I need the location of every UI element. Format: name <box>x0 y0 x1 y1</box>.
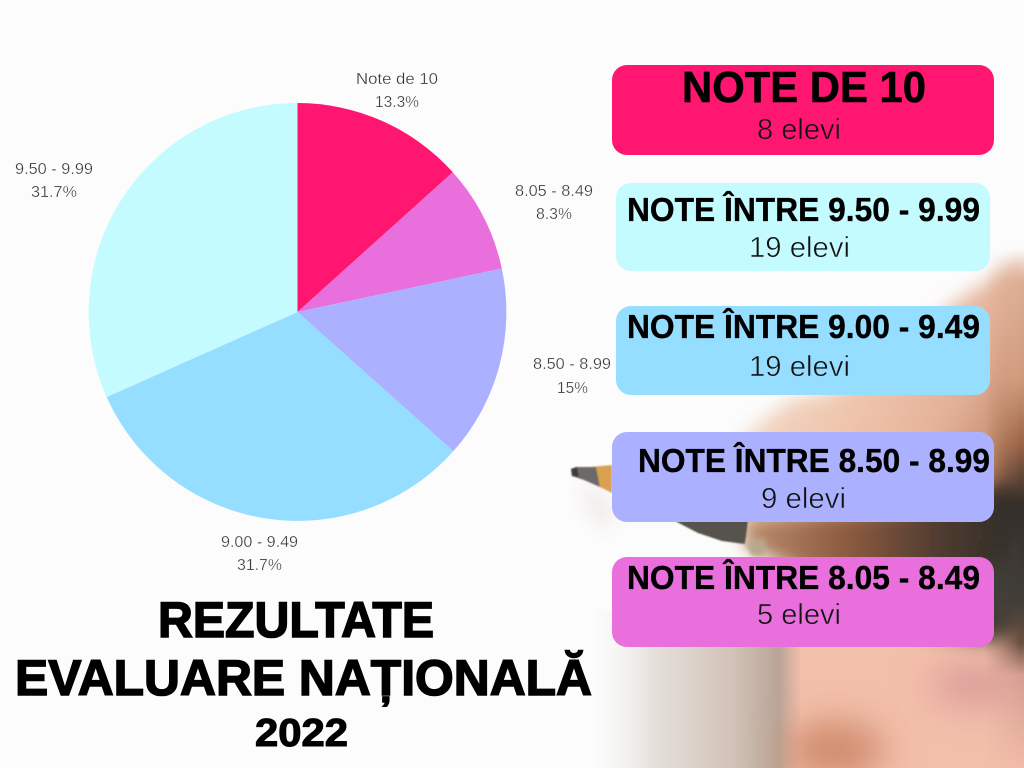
card: Note de 10: 8 elevi <box>757 114 841 146</box>
label: 8.05 - 8.49: 8.3% <box>536 206 572 223</box>
title: 2022 <box>255 712 348 755</box>
slice: 9.50 - 9.99 <box>89 103 297 397</box>
card: Note între 9.50 - 9.99 <box>616 183 990 271</box>
label: Note de 10: Note de 10 <box>356 71 438 88</box>
label: 8.05 - 8.49: 8.05 - 8.49 <box>515 183 593 200</box>
card: Note între 9.00 - 9.49 <box>616 306 990 395</box>
card: Note între 8.50 - 8.99: NOTE ÎNTRE 8.50 - 8.99 <box>638 442 990 479</box>
slice: 9.00 - 9.49 <box>107 312 453 521</box>
card: Note de 10 <box>612 63 994 155</box>
card: Note între 9.00 - 9.49: 19 elevi <box>749 351 850 383</box>
slice: 8.05 - 8.49 <box>298 172 502 312</box>
pie chart <box>89 103 506 521</box>
title <box>15 592 592 755</box>
card: Note între 9.00 - 9.49: NOTE ÎNTRE 9.00 - 9.49 <box>627 308 980 345</box>
label: Note de 10: 13.3% <box>375 94 419 111</box>
slice: 8.50 - 8.99 <box>298 268 506 451</box>
card: Note între 8.05 - 8.49: NOTE ÎNTRE 8.05 - 8.49 <box>627 559 980 596</box>
label: 8.50 - 8.99: 15% <box>557 380 588 397</box>
slice: Note de 10 <box>298 103 453 312</box>
label: 8.05 - 8.49 <box>515 183 593 223</box>
card: Note între 9.50 - 9.99: 19 elevi <box>749 232 850 264</box>
card: Note între 8.05 - 8.49: 5 elevi <box>757 599 841 631</box>
label: Note de 10 <box>356 71 438 111</box>
card: Note între 9.50 - 9.99: NOTE ÎNTRE 9.50 - 9.99 <box>627 191 980 228</box>
label: 8.50 - 8.99 <box>533 356 611 397</box>
background photo: hand holding pencil <box>570 251 1024 768</box>
label: 9.50 - 9.99: 9.50 - 9.99 <box>15 161 93 178</box>
label: 9.00 - 9.49: 31.7% <box>237 557 282 574</box>
title: REZULTATE <box>158 592 434 648</box>
label: 9.00 - 9.49: 9.00 - 9.49 <box>221 534 298 551</box>
label: 9.50 - 9.99: 31.7% <box>31 184 77 201</box>
card: Note între 8.50 - 8.99: 9 elevi <box>761 483 846 515</box>
label: 8.50 - 8.99: 8.50 - 8.99 <box>533 356 611 373</box>
card: Note între 8.05 - 8.49 <box>612 557 994 647</box>
label: 9.50 - 9.99 <box>15 161 93 201</box>
card: Note de 10: NOTE DE 10 <box>682 63 926 112</box>
label: 9.00 - 9.49 <box>221 534 298 574</box>
title: EVALUARE NAȚIONALĂ <box>15 650 592 706</box>
card: Note între 8.50 - 8.99 <box>612 432 994 522</box>
